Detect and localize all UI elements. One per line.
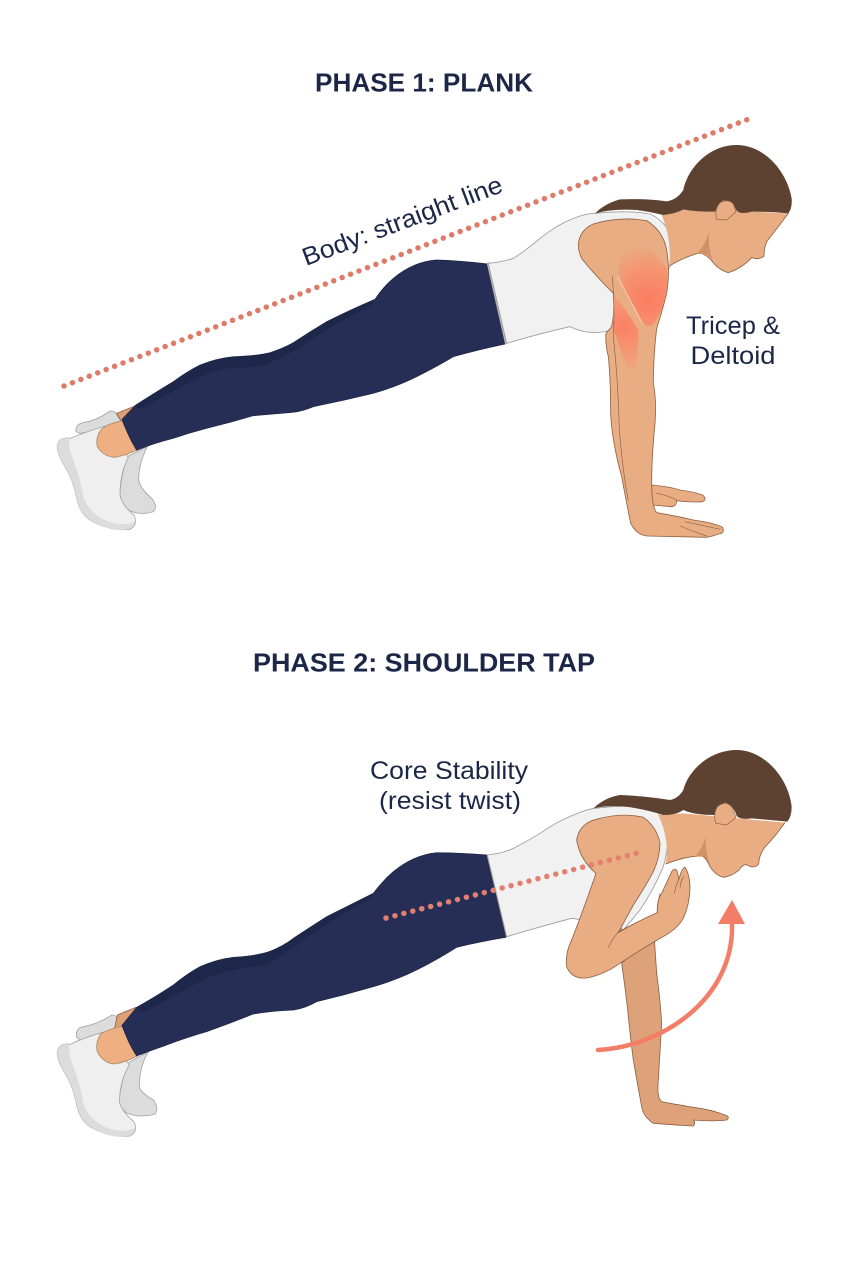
rear ankle: [112, 1007, 138, 1033]
hair: [593, 750, 792, 822]
tapping arm: [566, 815, 690, 978]
label: tricep and deltoid: Deltoid: [690, 342, 776, 370]
back shoe upper: [76, 1015, 125, 1040]
dotted core line: [386, 851, 645, 918]
leggings: [122, 853, 506, 1056]
finger and elbow lines: [608, 877, 683, 947]
face outline: [666, 823, 785, 877]
waist band shade: [487, 263, 508, 344]
rear ankle: [117, 406, 137, 422]
back shoe lower: [119, 1052, 157, 1116]
tap hand shadow arm: [617, 914, 667, 950]
label: core stability: Core Stability: [370, 757, 529, 785]
supporting arm: [578, 219, 723, 537]
tank top: [487, 806, 668, 937]
back hand: [652, 485, 705, 507]
arm muscle lines: [612, 277, 628, 500]
supporting arm: [622, 933, 728, 1126]
deltoid highlight: [618, 246, 668, 326]
neck shadow: [697, 228, 713, 262]
title: phase 1: PHASE 1: PLANK: [315, 68, 533, 98]
finger lines: [657, 493, 720, 536]
ear: [715, 803, 736, 825]
dotted body line: [64, 116, 755, 386]
neck shadow: [695, 832, 712, 868]
figure: shoulder tap torso, head and arms: [487, 750, 792, 1126]
shoe sole shade: [57, 438, 135, 530]
label: tricep and deltoid: [686, 312, 780, 370]
figure: shoulder tap legs: [57, 853, 506, 1137]
front ankle: [97, 1026, 137, 1064]
ear: [716, 201, 736, 220]
face outline: [669, 213, 788, 273]
label: core stability: [370, 757, 529, 815]
leg shadow: [137, 893, 373, 1013]
neck and face: [662, 208, 788, 273]
leg shadow: [135, 299, 375, 409]
front shoe: [57, 426, 135, 530]
neck and face: [658, 813, 785, 877]
front shoe: [57, 1032, 135, 1136]
arrow: shoulder tap motion: [598, 900, 745, 1050]
muscle separator: [617, 277, 643, 324]
tank top: [488, 212, 671, 343]
tricep highlight: [613, 295, 638, 380]
label: body straight line: Body: straight line: [298, 171, 507, 272]
back shoe lower: [120, 447, 155, 513]
shoe sole shade: [57, 1044, 135, 1137]
hair: [595, 145, 792, 215]
front ankle: [97, 421, 137, 457]
leggings: [122, 260, 505, 450]
label: tricep and deltoid: Tricep &: [686, 312, 780, 340]
figure: plank legs: [57, 260, 505, 530]
label: core stability: (resist twist): [379, 787, 521, 815]
waist band shade: [487, 855, 509, 937]
title: phase 2: PHASE 2: SHOULDER TAP: [253, 648, 595, 678]
back shoe upper: [76, 411, 123, 433]
figure: plank torso, head and arm: [487, 145, 792, 537]
